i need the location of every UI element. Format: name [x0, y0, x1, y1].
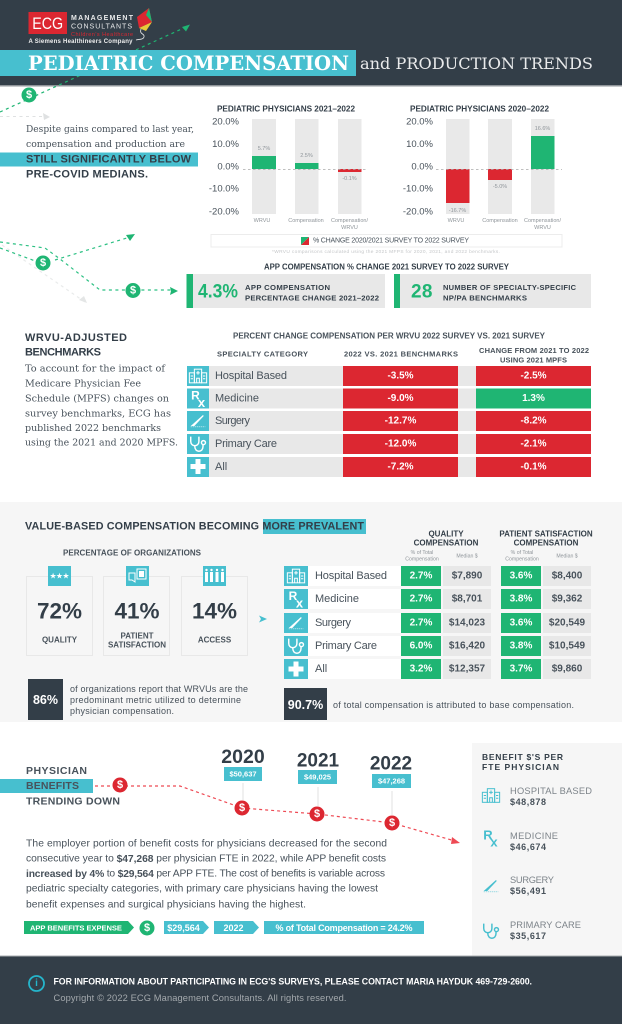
benefits body text: consecutive year to $47,268 per physician FTE in 2022, while APP benefit costs [26, 854, 386, 864]
row: hospital based: $8,400 [552, 570, 583, 582]
chart: pediatric physicians 2020-2022: WRVU [448, 218, 464, 224]
card: access [182, 566, 248, 656]
item: primary care: PRIMARY CARE [510, 920, 581, 930]
chart: pediatric physicians 2021-2022: WRVU [254, 218, 270, 224]
row: surgery [284, 613, 591, 633]
year 2021 [297, 750, 340, 822]
row: surgery: 3.6% [510, 618, 533, 628]
year 2022: 2022 [370, 754, 412, 774]
row: primary care [187, 434, 591, 454]
chart: pediatric physicians 2021-2022: 10.0% [212, 139, 240, 150]
stat: 28 benchmarks: NUMBER OF SPECIALTY-SPECIFIC [443, 283, 577, 292]
panel: benefit dollars per FTE physician: FTE PHYSICIAN [482, 762, 559, 772]
row: medicine: 3.8% [510, 594, 533, 604]
chart: pediatric physicians 2020-2022: 16.6% [535, 126, 550, 132]
row: surgery: Surgery [215, 415, 250, 427]
chart: pediatric physicians 2021-2022: PEDIATRIC PHYSICIANS 2021–2022 [217, 104, 355, 114]
row: surgery: -8.2% [520, 416, 547, 426]
callout: 86 percent: of organizations report that WRVUs are the [70, 684, 248, 694]
year 2020: 2020 [221, 746, 265, 768]
chart: pediatric physicians 2021-2022: Compensation [288, 218, 324, 224]
icon: red dollar start [112, 778, 128, 792]
card: quality [26, 566, 92, 656]
item: medicine: R [483, 828, 493, 842]
row: all: 3.2% [410, 664, 433, 674]
item: hospital based [482, 786, 592, 807]
title banner [0, 50, 593, 76]
compensation table: Median $ [456, 554, 478, 560]
row: medicine: x [296, 596, 304, 610]
chart: pediatric physicians 2021-2022: 2.5% [300, 153, 313, 159]
logo: Children's Healthcare [71, 32, 133, 38]
row: primary care: 3.8% [510, 640, 533, 652]
logo [28, 8, 152, 45]
physician benefits heading [0, 765, 120, 808]
WRVU table: 2022 VS. 2021 BENCHMARKS [344, 350, 458, 358]
WRVU table [187, 332, 591, 477]
footer: Copyright © 2022 ECG Management Consultants. All rights reserved. [54, 993, 346, 1003]
chart: pediatric physicians 2020-2022: WRVU [534, 225, 551, 231]
row: medicine: Medicine [315, 593, 359, 605]
year 2022: $ [389, 817, 395, 829]
chart footnote: *WRVU comparisons calculated using the 2021 MFPS for 2020, 2021, and 2022 benchmarks. [272, 249, 500, 255]
item: primary care: $35,617 [510, 931, 546, 941]
year 2020: $50,637 [229, 770, 257, 778]
physician benefits heading: TRENDING DOWN [26, 796, 120, 808]
chart: pediatric physicians 2021-2022: 5.7% [258, 146, 270, 152]
chart: pediatric physicians 2020-2022: Compensation/ [524, 218, 561, 224]
callout: 90.7 percent [284, 688, 574, 720]
percentage of organizations heading: PERCENTAGE OF ORGANIZATIONS [63, 548, 202, 558]
WRVU-adjusted text block: BENCHMARKS [25, 346, 101, 358]
row: surgery: $14,023 [449, 618, 486, 628]
row: all: -7.2% [387, 462, 414, 472]
chart: pediatric physicians 2020-2022: -5.0% [493, 184, 507, 190]
stat: 28 benchmarks: 28 [411, 282, 432, 302]
logo: MANAGEMENT [71, 15, 134, 22]
row: hospital based: -2.5% [520, 370, 547, 382]
callout: 86 percent: physician compensation. [70, 706, 174, 716]
value-based heading: VALUE-BASED COMPENSATION BECOMING MORE PREVALENT [25, 520, 364, 532]
benefits trend line [95, 783, 460, 844]
intro text: Despite gains compared to last year, [26, 124, 194, 135]
WRVU-adjusted text block: Schedule (MPFS) changes on [25, 394, 169, 404]
row: medicine [284, 589, 591, 610]
callout: 86 percent: 86% [33, 693, 58, 707]
icon: dollar coin top: $ [26, 89, 32, 101]
year 2021: $49,025 [304, 772, 331, 782]
year 2020: $ [239, 802, 245, 814]
arrow: grey dashed line under header [0, 113, 50, 120]
row: primary care: 6.0% [410, 640, 433, 652]
row: primary care: Primary Care [215, 438, 277, 450]
benefits body text: The employer portion of benefit costs for physicians decreased for the second [26, 838, 387, 850]
row: all [284, 659, 591, 679]
icon: dollar coin right [126, 283, 140, 298]
WRVU table: SPECIALTY CATEGORY [217, 350, 308, 358]
item: surgery: SURGERY [510, 875, 554, 885]
WRVU-adjusted text block [25, 332, 178, 448]
year 2022 [370, 754, 412, 830]
row: medicine: $9,362 [552, 594, 583, 604]
row: primary care [284, 636, 591, 656]
row: medicine [187, 388, 591, 410]
icon: dollar coin left: $ [40, 257, 46, 269]
stat: 4.3 percent [186, 274, 385, 308]
chart legend [211, 234, 562, 247]
item: surgery [484, 875, 554, 896]
row: surgery: -12.7% [385, 416, 416, 426]
row: primary care: -12.0% [385, 438, 416, 450]
title banner: and PRODUCTION TRENDS [360, 55, 593, 73]
APP benefits expense bar: $ [144, 922, 150, 934]
benefits body text [26, 838, 387, 910]
chart: pediatric physicians 2021-2022: -10.0% [209, 184, 240, 194]
APP benefits expense bar: $29,564 [167, 923, 200, 933]
chart: pediatric physicians 2021-2022 [209, 104, 368, 231]
item: medicine [483, 828, 558, 852]
row: surgery: $20,549 [549, 618, 586, 628]
chart: pediatric physicians 2021-2022: 0.0% [217, 162, 240, 172]
row: all: $12,357 [449, 664, 486, 674]
callout: 90.7 percent: of total compensation is attributed to base compensation. [333, 700, 574, 710]
card: quality: ★★★ [50, 572, 70, 580]
year 2021: $ [314, 808, 320, 820]
item: medicine: MEDICINE [510, 831, 558, 841]
item: hospital based: HOSPITAL BASED [510, 786, 592, 796]
panel: benefit dollars per FTE physician: BENEFIT $'S PER [482, 752, 563, 762]
compensation table [284, 530, 593, 679]
WRVU table: CHANGE FROM 2021 TO 2022 [479, 346, 589, 355]
callout: 86 percent [28, 679, 248, 720]
chart: pediatric physicians 2020-2022: 20.0% [406, 116, 434, 128]
title banner: PEDIATRIC COMPENSATION [28, 51, 349, 75]
physician benefits heading: BENEFITS [26, 780, 79, 792]
logo: CONSULTANTS [71, 24, 132, 30]
compensation table: COMPENSATION [414, 538, 479, 548]
compensation table: COMPENSATION [514, 538, 579, 548]
compensation table: Compensation [505, 556, 539, 562]
chart: pediatric physicians 2021-2022: Compensation/ [331, 218, 368, 224]
card: patient satisfaction: 41% [114, 598, 160, 624]
logo: A Siemens Healthineers Company [28, 39, 133, 45]
icon: red dollar start: $ [117, 779, 123, 791]
chart: pediatric physicians 2020-2022: -20.0% [403, 206, 434, 218]
row: all: All [315, 663, 327, 675]
value-based compensation panel background [0, 502, 622, 722]
row: all: All [215, 461, 227, 473]
panel: benefit dollars per FTE physician [472, 743, 622, 956]
row: medicine: -9.0% [387, 393, 414, 404]
WRVU-adjusted text block: WRVU-ADJUSTED [25, 332, 127, 344]
chart: pediatric physicians 2021-2022: 20.0% [212, 116, 240, 128]
APP benefits expense bar: APP BENEFITS EXPENSE [30, 924, 122, 932]
row: all: 3.7% [510, 664, 533, 674]
row: all: -0.1% [520, 462, 547, 472]
item: hospital based: $48,878 [510, 797, 546, 807]
benefits body text: pediatric specialty categories, with primary care physicians having the lowest [26, 884, 378, 894]
icon: info [29, 976, 44, 991]
chart: pediatric physicians 2020-2022: -10.0% [403, 184, 434, 194]
row: primary care: -2.1% [520, 438, 547, 450]
row: medicine: R [191, 388, 200, 402]
header band [0, 0, 622, 85]
chart: pediatric physicians 2021-2022: WRVU [341, 225, 358, 231]
row: all [187, 457, 591, 477]
intro text: PRE-COVID MEDIANS. [26, 168, 148, 180]
row: surgery: 2.7% [410, 618, 433, 628]
stat: 4.3 percent: 4.3% [198, 282, 238, 302]
chart: pediatric physicians 2020-2022: 0.0% [411, 162, 434, 172]
row: surgery [187, 411, 591, 431]
stat: 4.3 percent: APP COMPENSATION [245, 283, 330, 292]
callout: 90.7 percent: 90.7% [288, 698, 323, 712]
year 2022: $47,268 [378, 776, 405, 786]
APP benefits expense bar: % of Total Compensation = 24.2% [276, 923, 412, 933]
WRVU table: PERCENT CHANGE COMPENSATION PER WRVU 2022 SURVEY VS. 2021 SURVEY [233, 332, 546, 340]
WRVU table: USING 2021 MPFS [500, 356, 567, 364]
card: quality: QUALITY [42, 636, 78, 644]
row: all: $9,860 [552, 664, 583, 674]
stat: 28 benchmarks [394, 274, 591, 308]
row: medicine: 1.3% [522, 393, 545, 404]
row: primary care: $16,420 [449, 640, 486, 652]
arrow: rising green trend line [0, 24, 190, 112]
row: medicine: Medicine [215, 392, 259, 404]
chart: pediatric physicians 2020-2022: PEDIATRIC PHYSICIANS 2020–2022 [410, 104, 549, 114]
chart: pediatric physicians 2020-2022: Compensation [482, 218, 518, 224]
footer [0, 956, 622, 1024]
chart: pediatric physicians 2021-2022: -0.1% [342, 176, 357, 182]
item: surgery: $56,491 [510, 886, 546, 896]
compensation table: % of Total [511, 550, 533, 556]
icon: dollar coin left [36, 256, 50, 270]
header bottom rule [0, 85, 622, 86]
compensation table: Median $ [556, 554, 578, 560]
item: medicine: $46,674 [510, 842, 546, 852]
compensation table: Compensation [405, 556, 439, 562]
icon: info: i [35, 978, 38, 989]
intro text: STILL SIGNIFICANTLY BELOW [26, 154, 192, 166]
WRVU-adjusted text block: Medicare Physician Fee [25, 378, 141, 390]
card: patient satisfaction [104, 566, 170, 656]
callout: 86 percent: predominant metric utilized to determine [70, 695, 241, 705]
APP compensation heading: APP COMPENSATION % CHANGE 2021 SURVEY TO 2022 SURVEY [264, 262, 510, 272]
card: patient satisfaction: PATIENT [120, 632, 154, 640]
APP benefits expense bar: 2022 [223, 923, 244, 933]
row: medicine: 2.7% [410, 594, 433, 604]
row: medicine: $8,701 [452, 594, 483, 604]
arrow: cards to table [259, 616, 267, 622]
row: hospital based [284, 566, 591, 586]
arrows: lower green trend lines [0, 234, 178, 303]
benefits body text: increased by 4% to $29,564 per APP FTE. The cost of benefits is variable across [26, 868, 385, 880]
item: medicine: x [490, 834, 498, 850]
year 2020 [221, 746, 265, 816]
row: hospital based: 2.7% [410, 570, 433, 582]
card: access: ACCESS [198, 636, 232, 644]
row: hospital based: $7,890 [452, 570, 483, 582]
compensation table: % of Total [411, 550, 433, 556]
card: patient satisfaction: SATISFACTION [108, 640, 166, 650]
row: hospital based [187, 366, 591, 386]
stat: 28 benchmarks: NP/PA BENCHMARKS [443, 294, 527, 302]
year 2021: 2021 [297, 750, 340, 772]
WRVU-adjusted text block: using the 2021 and 2020 MPFS. [25, 438, 178, 448]
chart: pediatric physicians 2021-2022: -20.0% [209, 206, 240, 218]
physician benefits heading: PHYSICIAN [26, 765, 87, 777]
card: access: 14% [192, 598, 237, 624]
chart: pediatric physicians 2020-2022 [403, 104, 562, 231]
WRVU-adjusted text block: published 2022 benchmarks [25, 423, 161, 434]
chart: pediatric physicians 2020-2022: 10.0% [406, 139, 434, 150]
icon: dollar coin top [22, 88, 36, 102]
intro text [0, 124, 198, 180]
row: hospital based: -3.5% [387, 370, 414, 382]
compensation table: QUALITY [428, 530, 464, 538]
chart legend: % CHANGE 2020/2021 SURVEY TO 2022 SURVEY [313, 238, 469, 244]
benefits body text: benefit expenses and surgical physicians having the highest. [26, 900, 306, 910]
logo: ECG [32, 14, 63, 33]
APP benefits expense bar [24, 920, 424, 936]
intro text: compensation and production are [26, 139, 185, 150]
chart: pediatric physicians 2020-2022: -16.7% [449, 208, 466, 214]
row: surgery: Surgery [315, 617, 352, 629]
row: hospital based: 3.6% [510, 570, 533, 582]
row: medicine: R [289, 589, 298, 603]
row: hospital based: Hospital Based [215, 370, 287, 382]
icon: dollar coin right: $ [130, 284, 136, 296]
WRVU-adjusted text block: To account for the impact of [25, 364, 167, 374]
compensation table: PATIENT SATISFACTION [499, 530, 593, 538]
row: primary care: $10,549 [549, 640, 586, 652]
WRVU-adjusted text block: survey benchmarks, ECG has [25, 408, 171, 420]
row: hospital based: Hospital Based [315, 570, 387, 582]
row: medicine: x [198, 395, 206, 410]
footer: FOR INFORMATION ABOUT PARTICIPATING IN ECG'S SURVEYS, PLEASE CONTACT MARIA HAYDUK 469-729-2600. [54, 976, 532, 986]
stat: 4.3 percent: PERCENTAGE CHANGE 2021–2022 [245, 294, 379, 302]
row: primary care: Primary Care [315, 640, 377, 652]
card: quality: 72% [37, 598, 82, 624]
item: primary care [484, 920, 581, 941]
